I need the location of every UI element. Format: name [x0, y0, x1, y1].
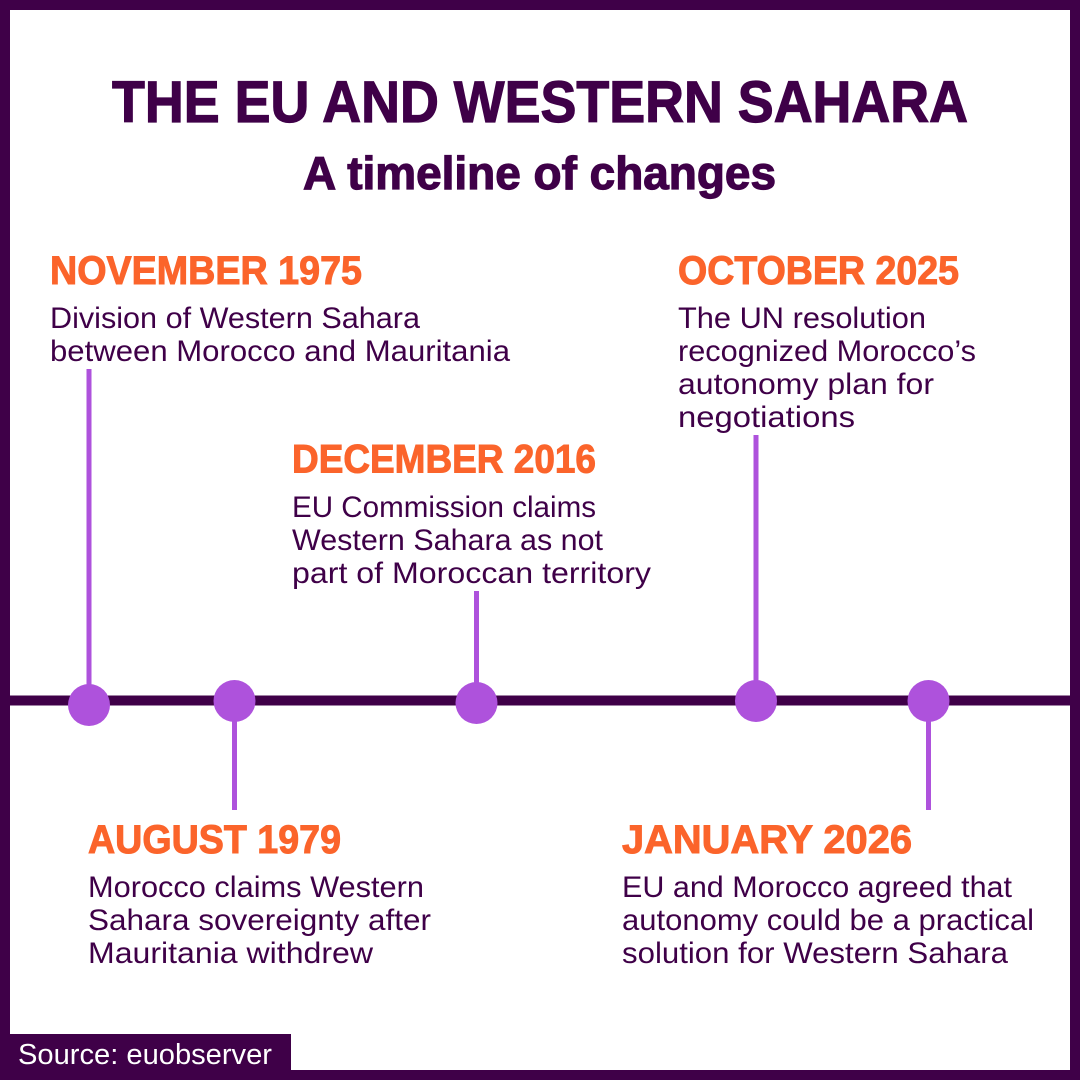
description: August 1979: [88, 871, 431, 970]
connector: November 1975: [86, 369, 92, 687]
description: October 2025: recognized Morocco’s: [678, 335, 976, 368]
source label: Source: euobserver: [18, 1039, 272, 1071]
date: November 1975: NOVEMBER 1975: [50, 249, 362, 293]
description: January 2026: solution for Western Sahara: [622, 937, 1008, 970]
date: January 2026: JANUARY 2026: [622, 818, 912, 862]
marker: January 2026: [908, 680, 950, 722]
date: October 2025: OCTOBER 2025: [678, 249, 959, 293]
description: October 2025: The UN resolution: [678, 302, 926, 335]
description: October 2025: autonomy plan for: [678, 368, 934, 401]
event: October 2025: [678, 249, 976, 722]
event: January 2026: [622, 680, 1034, 970]
description: January 2026: autonomy could be a practical: [622, 904, 1034, 937]
description: November 1975: Division of Western Sahara: [50, 302, 420, 335]
subtitle: A timeline of changes: [303, 147, 776, 199]
description: January 2026: [622, 871, 1034, 970]
description: October 2025: negotiations: [678, 401, 855, 434]
description: January 2026: EU and Morocco agreed that: [622, 871, 1013, 904]
description: November 1975: [50, 302, 510, 368]
marker: November 1975: [68, 684, 110, 726]
description: December 2016: part of Moroccan territory: [292, 557, 651, 590]
description: August 1979: Morocco claims Western: [88, 871, 424, 904]
connector: January 2026: [926, 718, 931, 810]
description: October 2025: [678, 302, 976, 434]
marker: October 2025: [735, 680, 777, 722]
description: August 1979: Mauritania withdrew: [88, 937, 373, 970]
source label: [0, 1034, 291, 1080]
marker: August 1979: [214, 680, 256, 722]
event: August 1979: [88, 680, 431, 970]
event: December 2016: [292, 438, 651, 724]
timeline axis: [10, 696, 1070, 706]
connector: August 1979: [232, 718, 237, 810]
description: December 2016: EU Commission claims: [292, 491, 596, 524]
description: November 1975: between Morocco and Mauritania: [50, 335, 510, 368]
date: December 2016: DECEMBER 2016: [292, 438, 596, 482]
connector: October 2025: [754, 435, 758, 685]
description: December 2016: [292, 491, 651, 590]
event: November 1975: [50, 249, 510, 726]
description: December 2016: Western Sahara as not: [292, 524, 604, 557]
title: THE EU AND WESTERN SAHARA: [112, 70, 968, 135]
marker: December 2016: [456, 682, 498, 724]
date: August 1979: AUGUST 1979: [88, 818, 341, 862]
connector: December 2016: [474, 591, 479, 686]
description: August 1979: Sahara sovereignty after: [88, 904, 431, 937]
